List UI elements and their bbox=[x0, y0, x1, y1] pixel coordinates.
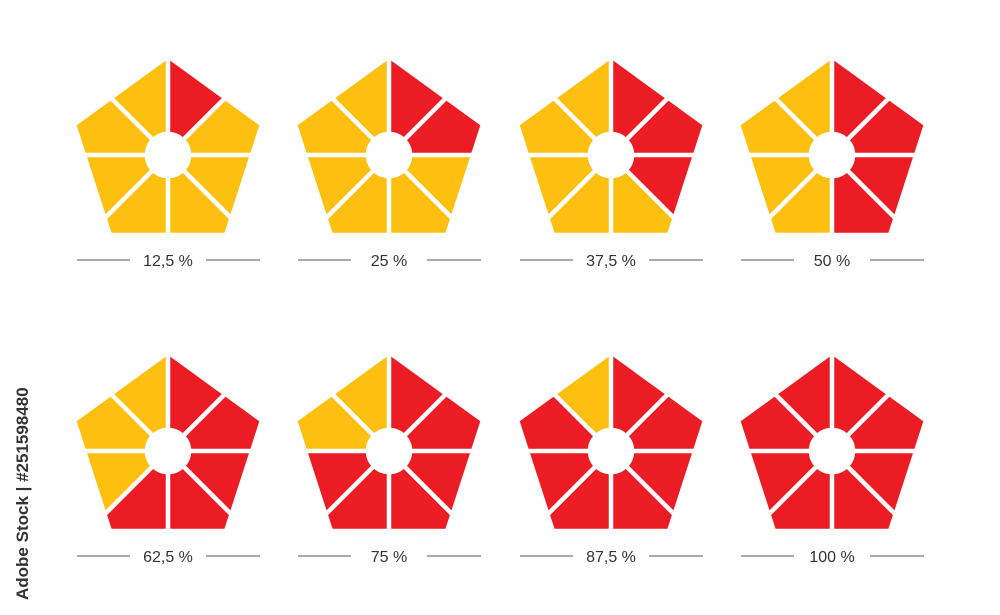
label: 37,5 %: 37,5 % bbox=[586, 253, 636, 270]
side text: stock id: Adobe Stock | #251598480 bbox=[13, 387, 32, 600]
pentagon chart: 75% bbox=[279, 341, 499, 561]
label: 87,5 %: 87,5 % bbox=[586, 549, 636, 566]
pentagon chart: 12.5% bbox=[58, 45, 278, 265]
pentagon chart: 100% bbox=[722, 341, 942, 561]
pentagon chart: 37.5% bbox=[501, 45, 721, 265]
pentagon chart: 25% bbox=[279, 45, 499, 265]
label: 50 %: 50 % bbox=[814, 253, 850, 270]
label: 62,5 %: 62,5 % bbox=[143, 549, 193, 566]
label: 100 %: 100 % bbox=[809, 549, 855, 566]
label: 25 %: 25 % bbox=[371, 253, 407, 270]
label: 75 %: 75 % bbox=[371, 549, 407, 566]
pentagon chart: 87.5% bbox=[501, 341, 721, 561]
pentagon chart: 50% bbox=[722, 45, 942, 265]
pentagon chart: 62.5% bbox=[58, 341, 278, 561]
label: 12,5 %: 12,5 % bbox=[143, 253, 193, 270]
